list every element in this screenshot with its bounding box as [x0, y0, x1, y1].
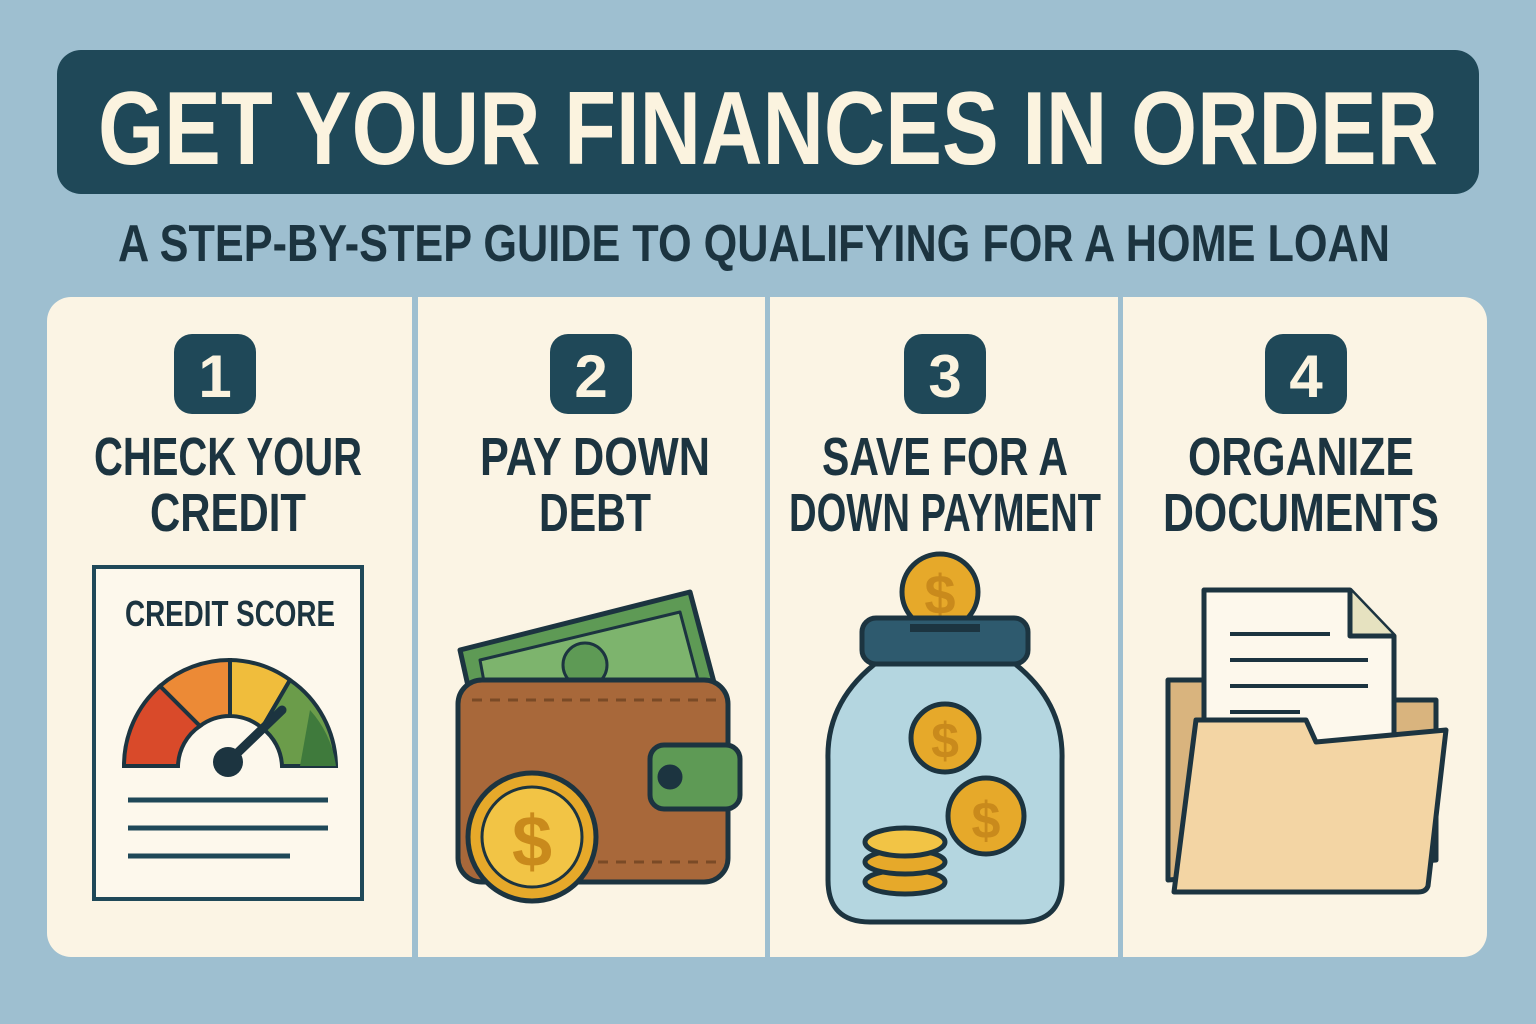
badge 1	[174, 334, 256, 414]
badge 3: 3	[928, 343, 962, 410]
heading 4	[1163, 427, 1439, 543]
heading 4: DOCUMENTS	[1163, 483, 1439, 543]
heading 2: DEBT	[539, 483, 651, 543]
badge 3	[904, 334, 986, 414]
icon: coin jar: $	[924, 563, 956, 626]
step 4: organize documents	[1163, 334, 1446, 892]
icon: wallet with cash and coin: $	[512, 802, 552, 882]
heading 1	[94, 427, 362, 543]
step 2: pay down debt	[458, 334, 740, 901]
step 3: save for a down payment	[789, 334, 1101, 922]
icon: coin jar	[828, 554, 1062, 922]
badge 1: 1	[198, 343, 232, 410]
icon: coin jar: $	[972, 792, 1001, 850]
heading 1: CHECK YOUR	[94, 427, 362, 487]
heading 4: ORGANIZE	[1188, 427, 1414, 487]
step 1: check your credit	[94, 334, 362, 899]
icon: folder with document	[1168, 590, 1446, 892]
heading 3	[789, 427, 1101, 543]
heading 3: DOWN PAYMENT	[789, 483, 1101, 543]
badge 4: 4	[1289, 343, 1323, 410]
badge 2	[550, 334, 632, 414]
steps panel	[47, 297, 1487, 957]
badge 4	[1265, 334, 1347, 414]
heading 1: CREDIT	[150, 483, 306, 543]
heading 3: SAVE FOR A	[822, 427, 1068, 487]
heading 2: PAY DOWN	[480, 427, 710, 487]
icon: wallet with cash and coin	[458, 592, 740, 901]
heading 2	[480, 427, 710, 543]
badge 2: 2	[574, 343, 608, 410]
icon: credit score report: CREDIT SCORE	[125, 593, 335, 634]
icon: coin jar: $	[931, 713, 959, 769]
icon: credit score report	[94, 567, 362, 899]
